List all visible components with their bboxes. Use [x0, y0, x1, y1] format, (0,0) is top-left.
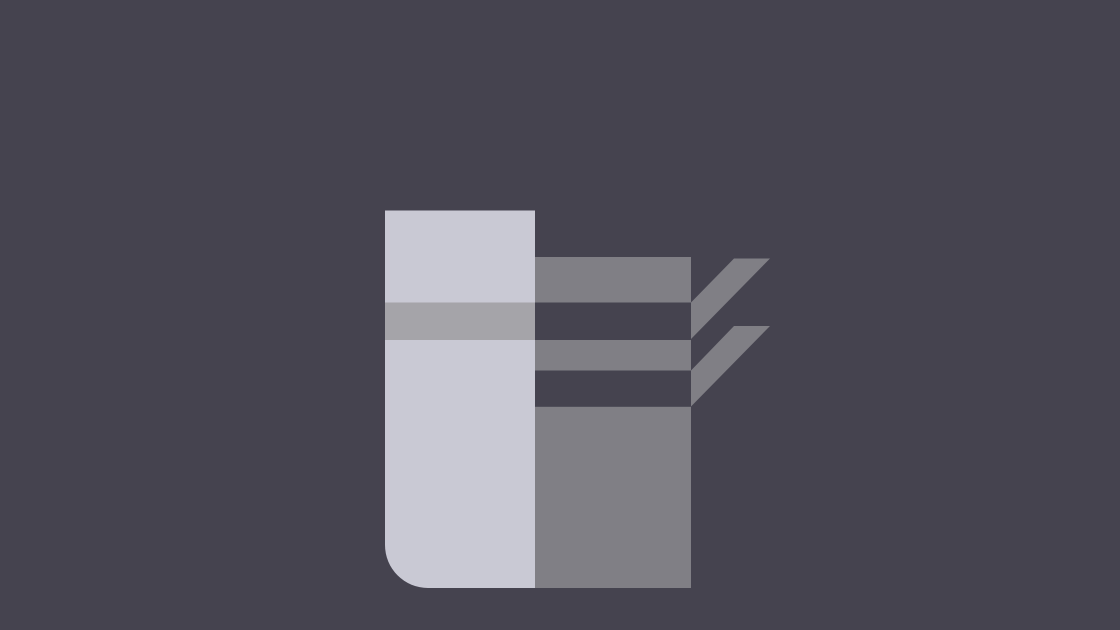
angled paper trays — [691, 258, 770, 406]
side panel strips — [535, 257, 691, 588]
light front panel — [385, 210, 535, 588]
